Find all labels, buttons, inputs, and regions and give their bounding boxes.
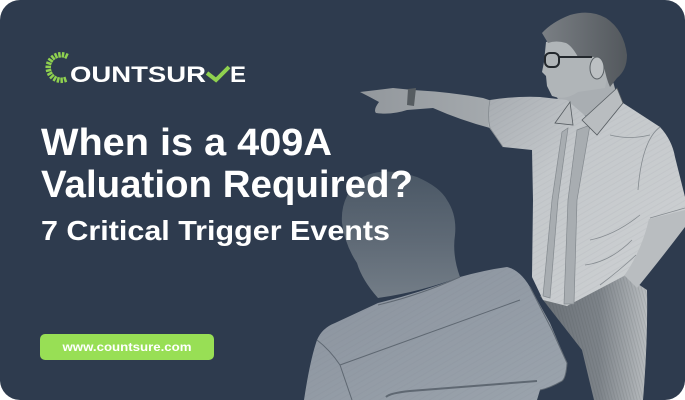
logo [46,52,246,87]
face [542,42,607,98]
seated man [304,172,567,400]
shirt placket and embroidery [543,125,590,304]
seated man's hair [342,172,460,298]
logo check mark [207,67,229,80]
title line 2: Valuation Required? [41,164,413,206]
forearm in pocket [622,208,685,288]
illustration: two figures [304,13,685,400]
subtitle: 7 Critical Trigger Events [41,215,390,246]
trousers [540,274,647,400]
button label: www.countsure.com [61,342,192,354]
website button [40,334,214,360]
shirt collar [555,88,623,135]
logo wordmark: OUNTSUR [70,62,206,87]
seated man's jacket [304,267,567,400]
logo mark: radial dashes [46,52,68,83]
logo wordmark end: E [230,62,246,87]
glasses [545,53,592,67]
shirt [488,88,685,306]
title line 1: When is a 409A [41,122,332,164]
hair [542,13,627,87]
jacket seams and chair back [317,277,567,400]
pointing arm [360,88,495,128]
shirt fold lines [488,100,685,285]
standing man [360,13,685,400]
title [41,122,413,246]
wristwatch [407,88,416,106]
button background [40,334,214,360]
ear [590,57,604,79]
head [542,13,627,98]
neck [557,79,616,116]
